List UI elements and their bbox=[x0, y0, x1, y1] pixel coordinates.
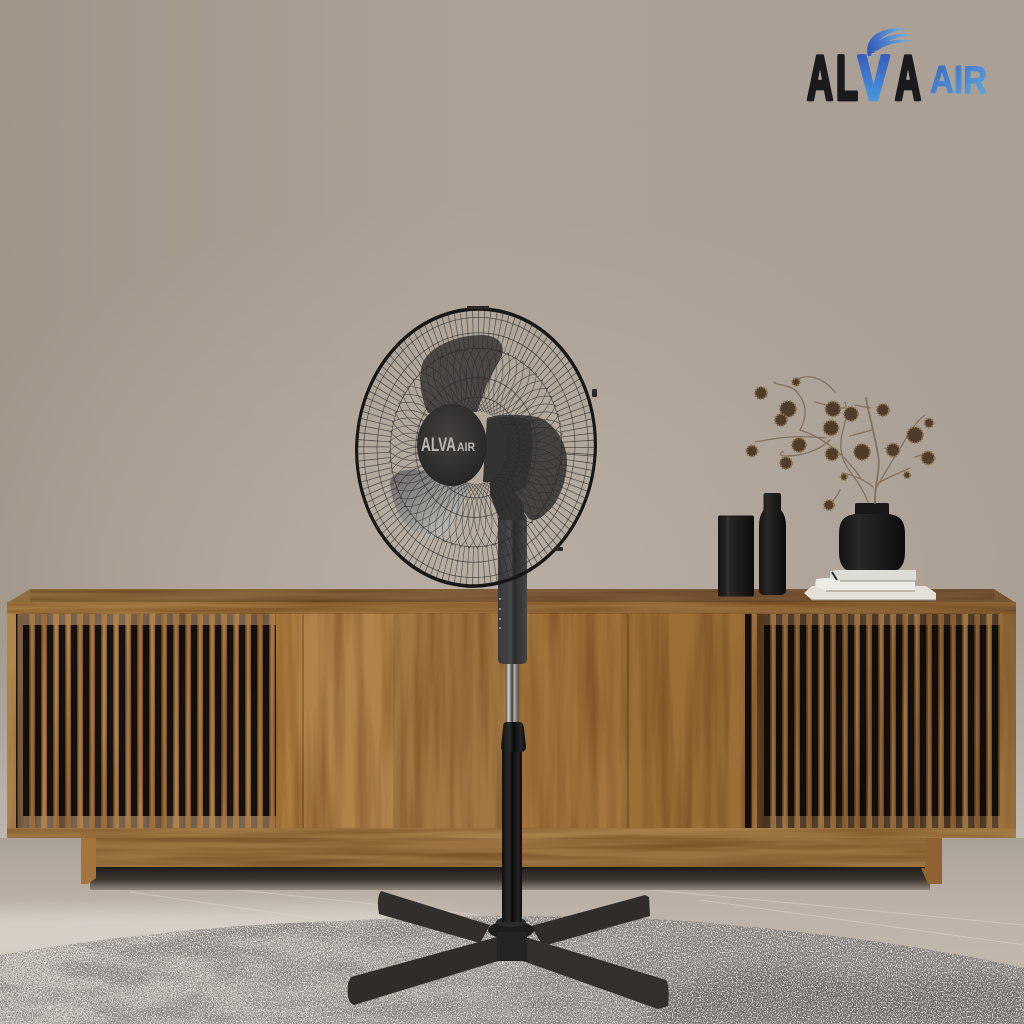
centre doors bbox=[276, 614, 745, 829]
cabinet front edge bbox=[7, 602, 1016, 614]
logo ALVA: A bbox=[895, 43, 921, 113]
rim clips bbox=[467, 306, 597, 551]
chrome pole bbox=[506, 660, 519, 724]
right leg bbox=[921, 838, 942, 884]
base leg back left bbox=[378, 891, 490, 943]
wood grain horizontal bbox=[7, 590, 1016, 867]
cabinet bbox=[7, 589, 1016, 884]
black bottle bbox=[759, 493, 786, 595]
outer rim bbox=[347, 301, 605, 594]
base leg back right bbox=[531, 895, 650, 946]
black cylinder bbox=[718, 516, 754, 596]
floor bbox=[0, 838, 1024, 1024]
plinth bbox=[81, 838, 942, 867]
fan blades bbox=[390, 335, 567, 537]
logo ALVA: A bbox=[807, 43, 833, 113]
logo AIR: AIR bbox=[930, 59, 987, 102]
curved inner wires bbox=[353, 308, 599, 587]
fan hub with badge bbox=[417, 404, 487, 486]
fan guard bbox=[347, 301, 605, 594]
logo ALVA: V bbox=[858, 43, 889, 113]
base hub bbox=[488, 917, 534, 961]
right blade bbox=[483, 415, 567, 520]
dried seed pods bbox=[746, 378, 934, 510]
stack of books bbox=[804, 570, 936, 600]
cabinet top surface bbox=[7, 589, 1016, 603]
radial outer wires bbox=[366, 322, 586, 573]
left slatted panel bbox=[16, 614, 276, 828]
wood grain vertical bbox=[7, 613, 1016, 829]
shadow under cabinet bbox=[90, 866, 930, 890]
decor on cabinet bbox=[718, 377, 936, 600]
black vase bbox=[839, 503, 905, 573]
right slatted panel bbox=[745, 614, 1000, 828]
logo ALVA bbox=[807, 43, 921, 113]
lower left blade bbox=[390, 470, 470, 537]
ALVA AIR brand logo bbox=[807, 28, 987, 113]
black lower pole bbox=[502, 750, 522, 922]
control housing bbox=[498, 508, 527, 664]
guard rings bbox=[355, 310, 597, 585]
rug bbox=[0, 910, 1024, 1024]
left leg bbox=[81, 838, 96, 884]
fan motor neck bbox=[490, 480, 524, 520]
fan hub with badge: AIR bbox=[457, 442, 476, 454]
height collar bbox=[501, 722, 526, 752]
bottom rail bbox=[7, 828, 1016, 838]
hub logo text: ALVA bbox=[421, 435, 456, 456]
fan base bbox=[348, 891, 669, 1009]
top blade bbox=[420, 335, 503, 413]
cabinet side frames bbox=[7, 613, 1016, 829]
stand fan bbox=[347, 301, 669, 1009]
dried branches bbox=[755, 377, 930, 503]
control buttons bbox=[499, 598, 501, 629]
base leg front left bbox=[348, 937, 498, 1005]
base leg front right bbox=[523, 937, 669, 1009]
logo swoosh bbox=[867, 28, 914, 56]
logo ALVA: L bbox=[836, 43, 858, 113]
